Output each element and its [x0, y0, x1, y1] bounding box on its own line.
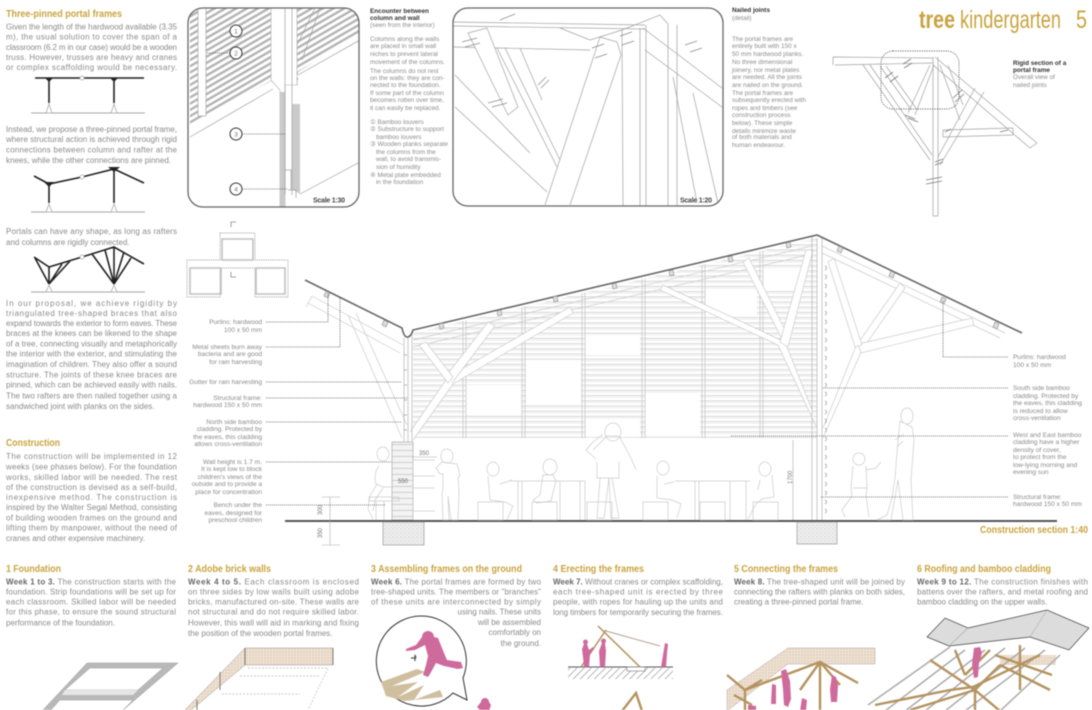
text block: encounter between column and wall: If some part of the column [370, 90, 444, 97]
illustration: foundation frame [42, 663, 178, 710]
text block: rigid section caption: nailed joints [1013, 82, 1047, 89]
text block: nailed joints: entirely built with 150 x [732, 43, 797, 50]
text block: nailed joints: are nailed on the ground. [732, 82, 803, 89]
text block: encounter between column and wall: it can easily be replaced. [370, 105, 441, 112]
step 2: adobe brick walls: bricks, manufactured on-site. These walls are [188, 598, 360, 606]
labels: right annotations: density of cover, [1013, 447, 1061, 454]
text block: encounter between column and wall: ③ Wooden planks separate [370, 141, 449, 148]
callout 1: bamboo louvers [230, 25, 242, 37]
text block: nailed joints: construction process [732, 112, 791, 119]
foundation left [383, 522, 424, 545]
callout 2: substructure [207, 47, 242, 59]
text block: encounter between column and wall: the columns from the [376, 149, 436, 156]
illustration: adobe walls [184, 648, 333, 710]
text block: encounter between column and wall: The columns do not rest [370, 68, 439, 75]
dimension marks: 1700 [788, 470, 794, 484]
dimension marks: 350 [419, 451, 430, 457]
text block: nailed joints: are needed. All the joints [732, 74, 802, 81]
roof truss [306, 246, 1005, 440]
dimension marks: 550 [398, 479, 409, 485]
step 6: roofing and bamboo cladding [868, 564, 1089, 710]
title: 5 [1076, 6, 1087, 34]
paragraph: construction method: works, skilled labor will be needed. The rest [5, 473, 178, 482]
labels: right annotations: 100 x 50 mm [1013, 362, 1052, 369]
step 4: erecting the frames: Week 7. Without cranes or complex scaffolding, [553, 578, 723, 586]
paragraph: triangulated braces: In our proposal, we achieve rigidity by [6, 299, 177, 308]
text block: encounter between column and wall: becomes rotten over time, [370, 97, 444, 104]
paragraph: construction method: The construction will be implemented in 12 [6, 452, 178, 461]
step 3: assembling frames: will be assembled [477, 618, 541, 627]
text block: encounter between column and wall: on the walls: they are con- [370, 75, 445, 82]
step 4: erecting the frames [553, 564, 724, 710]
step 1: foundation [6, 564, 178, 710]
text column: three-pinned portal frames [5, 9, 178, 411]
title: tree [919, 6, 955, 34]
text block: encounter between column and wall: nected to the foundation. [370, 82, 441, 89]
step 2: adobe brick walls: 2 Adobe brick walls [188, 564, 271, 575]
text block: encounter between column and wall: in the foundation [376, 179, 424, 186]
paragraph: three-pinned frame proposal: Instead, we propose a three-pinned portal frame, [6, 125, 177, 134]
step 6: roofing and bamboo cladding: Week 9 to 12. The construction finishes with [917, 578, 1088, 586]
step 2: adobe brick walls: Week 4 to 5. Each classroom is enclosed [188, 578, 359, 586]
labels: left annotations: bacteria and are good [198, 351, 262, 358]
paragraph: construction method: of the construction is devised as a self-build, [6, 483, 177, 492]
step 3: assembling frames: comfortably on [489, 628, 541, 637]
panel: nailed joints detail [453, 8, 723, 206]
illustration: connected frames [727, 648, 875, 710]
labels: right annotations: hardwood 150 x 50 mm [1013, 501, 1082, 508]
text block: nailed joints [731, 7, 806, 149]
text block: nailed joints: joinery, nor metal plates [731, 67, 799, 74]
text block: encounter between column and wall: wall, to avoid transmis- [375, 156, 441, 163]
step 6: roofing and bamboo cladding: 6 Roofing and bamboo cladding [917, 564, 1051, 575]
text block: encounter between column and wall [370, 8, 449, 186]
paragraph: hardwood length: m), the usual solution to cover the span of a [6, 32, 178, 42]
scale label: Scale 1:20 [680, 198, 712, 204]
paragraph: triangulated braces: expand towards the exterior to form eaves. These [6, 319, 178, 328]
labels: right annotations: cladding have a higher [1013, 439, 1080, 446]
step 1: foundation: Week 1 to 3. The construction starts with the [6, 578, 177, 586]
paragraph: any shape [6, 227, 177, 247]
step 1: foundation: each classroom. Skilled labor will be needed [6, 598, 176, 606]
labels: left annotations: Metal sheets burn away [192, 344, 263, 351]
furniture: benches, tables, stools [369, 460, 778, 520]
section drawing: construction section [266, 230, 1057, 545]
text block: nailed joints: No three dimensional [732, 59, 792, 66]
text block: nailed joints: human endeavour. [732, 142, 785, 149]
paragraph: triangulated braces: imagination of children. They also offer a sound [6, 360, 177, 369]
labels: left annotations: allows cross-ventilation [194, 441, 262, 448]
text block: rigid section caption: Rigid section of a [1013, 60, 1067, 67]
labels: right annotations: cladding. Protected by [1013, 393, 1079, 400]
labels: left annotations: Wall height is 1.7 m. [203, 459, 262, 466]
paragraph: triangulated braces: pinned, which can be achieved easily with nails. [6, 380, 177, 390]
metal roof [305, 235, 1022, 337]
text block: encounter between column and wall: column and wall [370, 15, 420, 22]
callout 4: metal plate: 4 [234, 186, 238, 194]
step 3: assembling frames [371, 564, 542, 710]
paragraph: hardwood length: truss. However, trusses are heavy and cranes [6, 53, 177, 62]
step 1: foundation: performance of the foundation. [6, 618, 115, 628]
text column: construction [5, 438, 178, 543]
step 1: foundation: 1 Foundation [6, 564, 61, 575]
illustration: roof and frames [868, 610, 1089, 710]
diagram: tree-shaped portal [31, 247, 145, 292]
dimension marks [318, 440, 794, 545]
text block: encounter between column and wall: ④ Metal plate embedded [370, 172, 441, 179]
labels: right annotations: Structural frame: [1013, 494, 1062, 501]
illustration: erecting diagram [568, 626, 673, 710]
text block: encounter between column and wall: bamboo louvers [376, 134, 421, 141]
labels: left annotations: the eaves, this cladding [193, 434, 262, 441]
paragraph: hardwood length: classroom (6.2 m in our case) would be a wooden [6, 43, 177, 52]
step 2: adobe brick walls: on three sides by low walls built using adobe [188, 588, 360, 596]
text block: encounter between column and wall: niches to prevent lateral [370, 51, 438, 58]
labels: left annotations: Purlins: hardwood [209, 319, 262, 326]
text block: encounter between column and wall: are placed in small wall [370, 43, 436, 50]
paragraph: construction method: of building wooden frames on the ground and [6, 514, 177, 522]
labels: left annotations: Gutter for rain harvesting [189, 379, 262, 386]
panel: column and wall detail [188, 8, 360, 207]
paragraph: three-pinned frame proposal: where structural action is achieved through rigid [5, 135, 177, 144]
paragraph: hardwood length [6, 22, 178, 72]
labels: left annotations: children's views of the [198, 474, 262, 481]
labels: left annotations: place for concentration [195, 489, 262, 496]
labels: left annotations: Bench under the [214, 502, 262, 509]
paragraph: three-pinned frame proposal: connections between column and rafter at the [6, 146, 178, 154]
paragraph: construction method: cranes and other expensive machinery. [6, 534, 145, 543]
paragraph: hardwood length: or complex scaffolding would be necessary. [6, 63, 177, 72]
labels: right annotations: is reduced to allow [1013, 408, 1068, 415]
paragraph: triangulated braces: the interior with the exterior, and stimulating the [6, 350, 178, 358]
step 2: adobe brick walls [184, 564, 360, 710]
diagram: angled portal [31, 167, 145, 212]
text block: rigid section caption [1013, 60, 1067, 89]
text block: rigid section caption: portal frame [1013, 67, 1050, 74]
heading: construction: Construction [6, 438, 60, 449]
text block: nailed joints: The portal frames are [732, 36, 794, 43]
paragraph: triangulated braces: structure. The joints of these knee braces are [6, 370, 178, 380]
labels: left annotations: preschool children [208, 517, 262, 524]
labels: left annotations: eaves, designed for [204, 510, 263, 517]
step 6: roofing and bamboo cladding: battens over the rafters, and metal roofing and [917, 588, 1088, 596]
dotted detail outline [881, 51, 959, 109]
diagram: rigid section of a portal frame [833, 51, 1037, 216]
labels: left annotations: 100 x 50 mm [224, 327, 262, 334]
labels: right annotations: South side bamboo [1013, 385, 1070, 392]
text block: encounter between column and wall: ① Bamboo louvers [370, 119, 424, 126]
callout 2: substructure: 2 [234, 50, 238, 58]
step 2: adobe brick walls: the position of the wooden portal frames. [188, 629, 333, 638]
step 1: foundation: foundation. Strip foundations will be set up for [6, 588, 176, 596]
ground line [285, 520, 1057, 522]
paragraph: triangulated braces: triangulated tree-shaped braces that also [6, 309, 178, 318]
text block: rigid section caption: Overall view of [1013, 74, 1055, 81]
text block: encounter between column and wall: movement of the columns. [370, 59, 445, 66]
step 4: erecting the frames: 4 Erecting the frames [553, 564, 644, 575]
adobe brick wall [392, 442, 413, 520]
step 3: assembling frames: using nails. These units [458, 608, 541, 616]
paragraph: any shape: Portals can have any shape, as long as rafters [6, 227, 177, 236]
paragraph: construction method: weeks (see phases below). For the foundation [5, 462, 177, 472]
step 2: adobe brick walls: not structural and do not require skilled labor. [188, 608, 359, 616]
heading: three-pinned portal frames: Three-pinned portal frames [6, 9, 122, 20]
diagram: truss portal [31, 76, 145, 113]
text block: encounter between column and wall: sion of humidity [376, 164, 421, 171]
paragraph: construction method: inspired by the Walter Segal Method, consisting [6, 503, 177, 512]
labels: left annotations: hardwood 150 x 50 mm [193, 402, 263, 409]
step 4: erecting the frames: each tree-shaped unit is erected by three [553, 588, 724, 596]
people [368, 408, 914, 520]
paragraph: construction method [5, 452, 178, 543]
labels: left annotations: North side bamboo [206, 419, 262, 426]
scale label: Scale 1:30 [313, 198, 345, 204]
illustration: speech bubble with carpenter [376, 616, 491, 710]
text block: nailed joints: Nailed joints [732, 7, 770, 14]
paragraph: hardwood length: Given the length of the hardwood available (3.35 [6, 22, 178, 32]
step 3: assembling frames: 3 Assembling frames on the ground [371, 564, 522, 575]
step 1: foundation: for this phase, to ensure the sound structural [6, 608, 176, 616]
labels: right annotations: to protect from the [1013, 454, 1067, 461]
step 5: connecting the frames: Week 8. The tree-shaped unit will be joined by [734, 578, 905, 586]
callout 1: bamboo louvers: 1 [234, 28, 238, 36]
text block: nailed joints: below). These simple [732, 120, 793, 127]
paragraph: triangulated braces: of a tree, connecting visually and metaphorically [6, 340, 177, 348]
text block: nailed joints: 50 mm hardwood planks. [732, 51, 804, 58]
labels: left annotations [189, 319, 263, 524]
bamboo wall louvers [413, 230, 817, 438]
step 4: erecting the frames: people, with ropes for hauling up the units and [553, 598, 723, 606]
text block: nailed joints: details minimize waste [732, 128, 796, 135]
foundation right [797, 522, 837, 544]
text block: encounter between column and wall: Columns along the walls [370, 36, 439, 43]
paragraph: any shape: and columns are rigidly connected. [6, 238, 130, 247]
paragraph: construction method: lifting them by manpower, without the need of [6, 524, 178, 532]
diagram: plan of wall niches [187, 222, 288, 297]
step 5: connecting the frames: 5 Connecting the frames [734, 564, 838, 575]
labels: left annotations: for rain harvesting [209, 359, 262, 366]
step 5: connecting the frames: connecting the rafters with planks on both sides, [734, 588, 905, 596]
text block: nailed joints: of both materials and [732, 134, 792, 141]
step 3: assembling frames: the ground. [501, 639, 541, 648]
callout 4: metal plate [230, 183, 288, 195]
labels: left annotations: cladding. Protected by [197, 426, 263, 433]
text block: nailed joints: ropes and timbers (see [732, 105, 798, 112]
text block: encounter between column and wall: ② Substructure to support [370, 126, 444, 133]
labels: right annotations: the eaves, this cladding [1013, 400, 1082, 407]
labels: right annotations: West and East bamboo [1013, 432, 1082, 439]
labels: left annotations: Structural frame: [213, 395, 262, 402]
text block: encounter between column and wall: (seen from the interior) [370, 22, 435, 29]
paragraph: three-pinned frame proposal [5, 125, 178, 165]
labels: right annotations: low-lying morning and [1013, 462, 1077, 469]
step 6: roofing and bamboo cladding: bamboo cladding on the upper walls. [917, 598, 1047, 606]
step 4: erecting the frames: long timbers for temporarily securing the frames. [553, 608, 723, 617]
callout 3: wooden planks: 3 [234, 132, 238, 138]
step 2: adobe brick walls: However, this wall will aid in marking and fixing [188, 618, 359, 628]
step 3: assembling frames: Week 6. The portal frames are formed by two [371, 578, 542, 586]
paragraph: construction method: inexpensive method. The construction is [6, 493, 177, 502]
step 3: assembling frames: tree-shaped units. The members or "branches" [371, 588, 541, 596]
labels: right annotations: evening sun [1013, 469, 1049, 476]
text block: encounter between column and wall: Encounter between [370, 8, 429, 15]
paragraph: triangulated braces: sandwiched joint with planks on the sides. [6, 402, 155, 411]
leader lines [266, 293, 1008, 505]
text block: nailed joints: subsequently erected with [732, 97, 806, 104]
purlins [324, 242, 999, 329]
columns [404, 236, 822, 520]
dimension marks: 350 [318, 527, 324, 538]
step 5: connecting the frames: creating a three-pinned portal frame. [734, 598, 863, 606]
bamboo section marks [404, 266, 826, 513]
paragraph: triangulated braces [6, 299, 178, 411]
callout 3: wooden planks [230, 128, 285, 140]
labels: right annotations: cross-ventilation [1013, 415, 1061, 422]
step 5: connecting the frames [727, 564, 905, 710]
labels: left annotations: It is kept low to block [201, 466, 263, 473]
labels: left annotations: outside and to provide a [192, 481, 262, 488]
labels: right annotations: Purlins: hardwood [1013, 354, 1066, 361]
paragraph: three-pinned frame proposal: knees, while the other connections are pinned. [6, 156, 171, 165]
paragraph: triangulated braces: braces at the knees can be likened to the shape [6, 329, 178, 338]
paragraph: triangulated braces: The two rafters are then nailed together using a [6, 392, 178, 400]
text block: nailed joints: The portal frames are [732, 90, 794, 97]
dimension marks: 300 [318, 504, 324, 515]
labels: right annotations [1013, 354, 1082, 508]
step 3: assembling frames: of these units are interconnected by simply [371, 598, 541, 606]
text block: nailed joints: (detail) [732, 15, 752, 22]
